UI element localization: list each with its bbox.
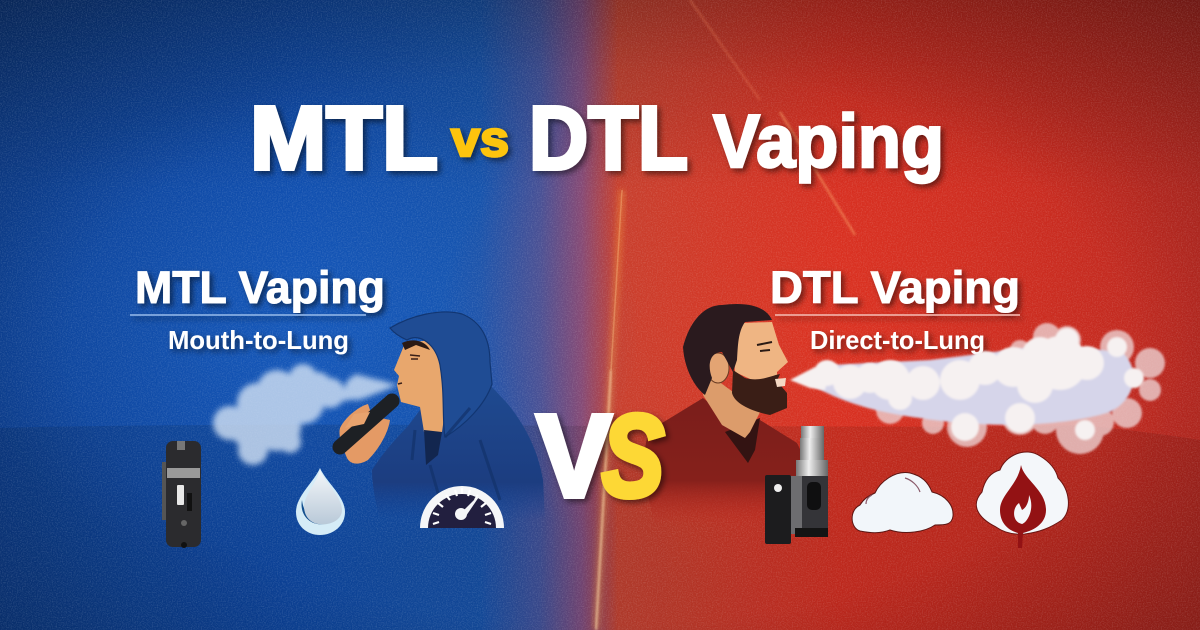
neck — [703, 375, 760, 438]
DTL vapour cloud — [790, 323, 1165, 454]
right heading: DTL Vaping — [770, 262, 1020, 355]
ear — [707, 353, 729, 383]
man in red shirt vaping — [645, 304, 815, 525]
right heading: DTL Vaping: Direct-to-Lung — [810, 325, 985, 355]
eye and brow — [757, 342, 772, 351]
title: MTL — [250, 89, 438, 189]
VS badge — [537, 391, 664, 521]
undershirt — [725, 418, 760, 463]
hoodie body — [372, 385, 545, 520]
outer translucent puffs — [876, 323, 1165, 454]
hoodie shadow folds — [412, 408, 500, 500]
left heading: MTL Vaping — [130, 262, 385, 355]
white puffs — [790, 328, 1144, 441]
hair — [683, 304, 772, 395]
VS badge: S — [602, 391, 664, 521]
face — [733, 322, 788, 392]
icon: liquid drop — [296, 468, 345, 535]
centre light streak — [596, 0, 855, 630]
icon: cloud — [852, 473, 953, 533]
title: vs — [451, 111, 509, 167]
title — [250, 89, 944, 189]
hand palm — [339, 404, 390, 464]
hood — [390, 312, 492, 437]
fingers — [345, 412, 370, 428]
left heading: MTL Vaping: MTL Vaping — [135, 262, 385, 313]
man in blue hoodie vaping — [339, 312, 545, 520]
inner collar — [424, 430, 442, 465]
title: Vaping — [713, 99, 944, 183]
icon: speed gauge — [420, 486, 504, 528]
hair — [402, 340, 430, 350]
icon: flame cloud — [976, 452, 1068, 548]
icon: box mod with tank — [765, 426, 828, 544]
shirt — [645, 398, 815, 525]
face and neck — [394, 340, 452, 432]
icon: pod device — [162, 441, 201, 548]
beard — [732, 370, 787, 415]
left heading: MTL Vaping: Mouth-to-Lung — [168, 325, 349, 355]
VS badge: V — [537, 391, 611, 521]
vape pen — [340, 401, 392, 447]
title: DTL — [529, 89, 688, 189]
eye and lips — [398, 355, 420, 384]
lavender inner body — [800, 345, 1134, 425]
right heading: DTL Vaping: DTL Vaping — [770, 262, 1020, 313]
MTL vapour cloud — [213, 364, 398, 465]
mouth — [775, 378, 786, 387]
